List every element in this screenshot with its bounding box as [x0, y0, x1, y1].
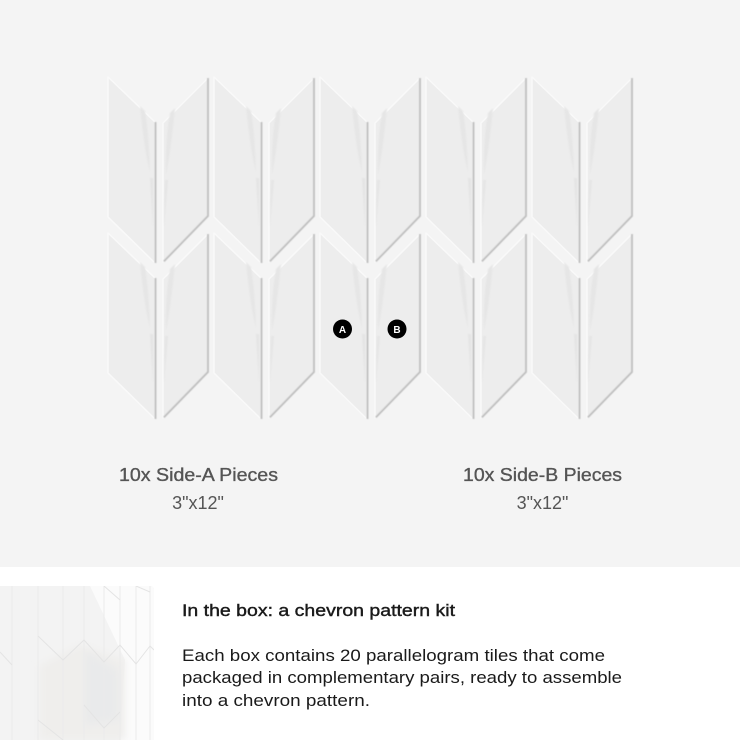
body text: packaged in complementary pairs, ready to assemble — [182, 668, 622, 687]
background panel — [0, 0, 740, 567]
badge: A: A — [339, 325, 346, 336]
badge: A — [333, 320, 352, 338]
heading: In the box: a chevron pattern kit — [182, 602, 455, 620]
body text: into a chevron pattern. — [182, 691, 370, 710]
chevron tile layout — [108, 77, 633, 419]
label: side B pieces: 10x Side-B Pieces — [463, 464, 622, 485]
badge: B — [388, 320, 406, 338]
label: side A pieces: 3"x12" — [172, 493, 224, 513]
body text: Each box contains 20 parallelogram tiles that come — [182, 646, 605, 665]
text block: kit description — [182, 602, 622, 710]
body text — [182, 646, 622, 710]
label: side A pieces — [119, 464, 278, 513]
label: side A pieces: 10x Side-A Pieces — [119, 464, 278, 485]
tiles: row 2 — [108, 233, 633, 419]
label: side B pieces: 3"x12" — [517, 493, 568, 513]
tiles: row 1 — [108, 77, 633, 263]
bottom panel — [0, 567, 740, 740]
label: side B pieces — [463, 464, 622, 513]
badge: B: B — [393, 325, 401, 336]
photo: installed chevron wall — [0, 586, 154, 740]
